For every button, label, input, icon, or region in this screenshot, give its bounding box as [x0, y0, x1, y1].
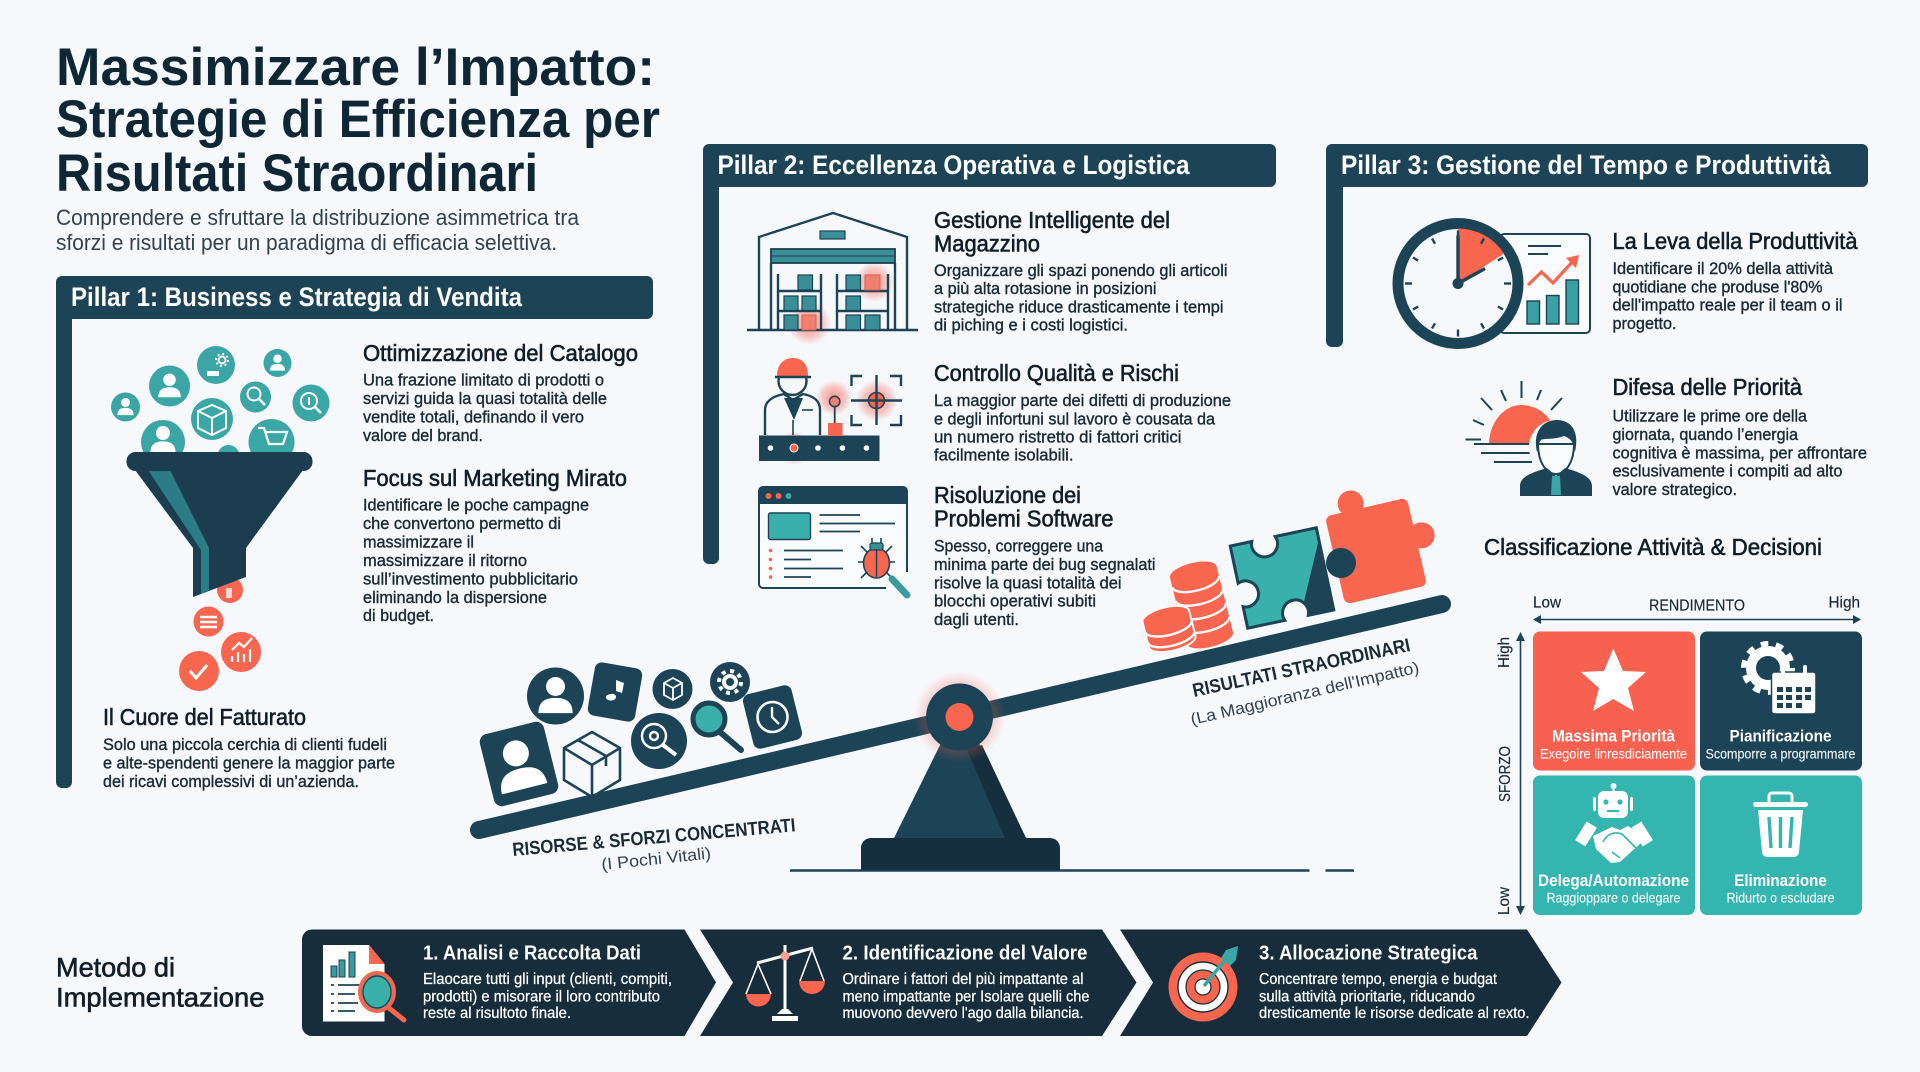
text: focus marketing: di budget. — [363, 606, 434, 625]
step 2 arrow: muovono devvero l'ago dalla bilancia. — [842, 1005, 1084, 1022]
quadrant: eliminazione: Eliminazione — [1734, 871, 1827, 890]
icon: sunrise and person — [1466, 381, 1592, 496]
step 3 arrow: 3. Allocazione Strategica — [1259, 942, 1478, 964]
text: leva produttivita: progetto. — [1612, 314, 1676, 333]
text: ottimizzazione: Una frazione limitato di prodotti o — [363, 370, 604, 390]
text: controllo qualita — [934, 360, 1231, 464]
text: ottimizzazione: Ottimizzazione del Catalogo — [363, 340, 638, 366]
text: cuore del fatturato: Il Cuore del Fatturato — [103, 704, 306, 730]
horizontal axis: Low — [1533, 594, 1561, 612]
vertical axis: High — [1496, 637, 1513, 668]
pillar 1 heading: Pillar 1: Business e Strategia di Vendita — [71, 282, 523, 312]
step 1 arrow: prodotti) e misorare il loro contributo — [423, 988, 660, 1006]
quadrant: massima priorita — [1533, 632, 1695, 770]
quadrant: massima priorita: Massima Priorità — [1552, 726, 1675, 746]
text: problemi software — [934, 482, 1156, 629]
text: focus marketing: Identificare le poche campagne — [363, 496, 589, 514]
text: cuore del fatturato: dei ricavi complessivi di un’azienda. — [103, 772, 359, 791]
quadrant: pianificazione — [1700, 632, 1862, 770]
text: difesa priorita: giornata, quando l’energia — [1612, 425, 1799, 444]
beam — [479, 604, 1442, 830]
icon: document and magnifier — [323, 945, 404, 1022]
text: gestione magazzino: a più alta rotasione in posizioni — [934, 279, 1156, 298]
text: problemi software: dagli utenti. — [934, 610, 1019, 629]
matrix heading: Classificazione Attività & Decisioni — [1484, 534, 1822, 560]
title — [56, 38, 660, 203]
subtitle: Comprendere e sfruttare la distribuzione asimmetrica tra — [56, 205, 580, 230]
quadrant: pianificazione: Scomporre a programmare — [1706, 746, 1856, 762]
quadrant: pianificazione: Pianificazione — [1730, 726, 1832, 746]
text: focus marketing: sull’investimento pubblicitario — [363, 570, 578, 588]
text: gestione magazzino: di piching e i costi logistici. — [934, 316, 1128, 334]
text: leva produttivita: La Leva della Produttività — [1612, 228, 1858, 254]
chart: seesaw balance — [478, 474, 1446, 874]
title: Strategie di Efficienza per — [56, 90, 660, 149]
text: controllo qualita: e degli infortuni sul lavoro è cousata da — [934, 410, 1216, 428]
label: left side: RISORSE & SFORZI CONCENTRATI — [512, 815, 796, 861]
subtitle — [56, 205, 580, 255]
subtitle: sforzi e risultati per un paradigma di efficacia selettiva. — [56, 230, 557, 255]
icon: worker and quality control — [759, 358, 902, 465]
text: ottimizzazione: servizi guida la quasi totalità delle — [363, 389, 607, 408]
panel: priority matrix — [1484, 534, 1862, 915]
step 3 arrow: dresticamente le risorse dedicate al rexto. — [1259, 1005, 1530, 1022]
text: problemi software: risolve la quasi totalità dei — [934, 574, 1122, 592]
icon: funnel with circles — [111, 346, 330, 691]
heading: metodo: Implementazione — [56, 982, 264, 1012]
step 1 arrow: Elaocare tutti gli input (clienti, compiti, — [423, 971, 672, 988]
text: focus marketing: massimizzare il ritorno — [363, 551, 527, 570]
text: focus marketing: massimizzare il — [363, 532, 474, 552]
quadrant: massima priorita: Exegoire linresdiciamente — [1540, 746, 1687, 762]
quadrant: eliminazione: Ridurto o escludare — [1726, 890, 1835, 906]
text: focus marketing: che convertono permetto di — [363, 514, 561, 533]
step 2 arrow: 2. Identificazione del Valore — [842, 942, 1088, 964]
quadrant: delega: Raggioppare o delegare — [1546, 890, 1681, 906]
text: controllo qualita: La maggior parte dei difetti di produzione — [934, 391, 1231, 410]
text: gestione magazzino: Organizzare gli spazi ponendo gli articoli — [934, 261, 1228, 280]
icon: target and arrow — [1168, 946, 1238, 1022]
step 3 arrow: sulla attività prioritarie, riducando — [1259, 988, 1475, 1006]
panel: pillar 3 — [1326, 144, 1868, 499]
panel: pillar 1 — [56, 276, 653, 791]
horizontal axis — [1533, 594, 1861, 624]
step 2 arrow: Ordinare i fattori del più impattante al — [842, 971, 1084, 988]
text: gestione magazzino: Magazzino — [934, 230, 1040, 256]
text: difesa priorita: Difesa delle Priorità — [1612, 374, 1802, 400]
title: Massimizzare l’Impatto: — [56, 38, 655, 97]
pillar 2 heading: Pillar 2: Eccellenza Operativa e Logistica — [718, 150, 1190, 180]
icon: puzzle pieces — [1230, 474, 1446, 628]
icon: warehouse — [747, 213, 918, 345]
panel: pillar 2 — [703, 144, 1276, 629]
step 1 arrow — [302, 930, 716, 1036]
text: difesa priorita: cognitiva è massima, per affrontare — [1612, 444, 1867, 462]
text: difesa priorita: valore strategico. — [1612, 480, 1737, 499]
step 1 arrow: reste al risultoto finale. — [423, 1005, 571, 1022]
horizontal axis: RENDIMENTO — [1649, 598, 1745, 614]
text: cuore del fatturato — [103, 704, 395, 791]
quadrant: delega — [1533, 776, 1695, 915]
vertical axis: Low — [1496, 887, 1513, 915]
pillar 2 frame — [703, 144, 1276, 564]
step 2 arrow: meno impattante per Isolare quelli che — [842, 988, 1090, 1006]
title: Risultati Straordinari — [56, 144, 538, 203]
quadrant: eliminazione — [1700, 776, 1862, 915]
text: ottimizzazione — [363, 340, 638, 445]
text: leva produttivita: Identificare il 20% della attività — [1612, 259, 1834, 278]
label: left side: (I Pochi Vitali) — [601, 845, 712, 874]
icon: browser with bug — [759, 487, 907, 595]
text: gestione magazzino — [934, 207, 1228, 334]
text: controllo qualita: un numero ristretto di fattori critici — [934, 428, 1182, 446]
pillar 1 frame — [56, 276, 653, 788]
label: left side — [512, 815, 796, 874]
text: problemi software: minima parte dei bug segnalati — [934, 555, 1156, 574]
text: focus marketing: eliminando la dispersione — [363, 588, 547, 607]
text: leva produttivita — [1612, 228, 1858, 333]
text: cuore del fatturato: e alte-spendenti genere la maggior parte — [103, 754, 395, 772]
text: cuore del fatturato: Solo una piccola cerchia di clienti fudeli — [103, 735, 387, 754]
step 3 arrow: Concentrare tempo, energia e budgat — [1259, 971, 1497, 988]
text: gestione magazzino: Gestione Intelligente del — [934, 207, 1170, 233]
step 1 arrow: 1. Analisi e Raccolta Dati — [423, 942, 641, 964]
text: ottimizzazione: vendite totali, definando il vero — [363, 408, 584, 426]
text: focus marketing — [363, 465, 627, 625]
text: controllo qualita: facilmente isolabili. — [934, 446, 1074, 464]
quadrant: delega: Delega/Automazione — [1538, 871, 1689, 890]
vertical axis: SFORZO — [1497, 746, 1514, 802]
text: problemi software: Problemi Software — [934, 506, 1114, 532]
heading: metodo: Metodo di — [56, 952, 175, 982]
fulcrum base — [790, 671, 1354, 870]
label: right side: RISULTATI STRAORDINARI — [1191, 635, 1412, 702]
vertical axis — [1496, 632, 1525, 915]
text: leva produttivita: dell'impatto reale per il team o il — [1612, 296, 1842, 314]
text: problemi software: Spesso, correggere una — [934, 536, 1104, 556]
icon: coins — [1140, 557, 1235, 656]
icon: scales — [746, 945, 825, 1021]
pillar 3 frame — [1326, 144, 1868, 347]
pillar 3 heading: Pillar 3: Gestione del Tempo e Produttività — [1341, 150, 1832, 180]
label: right side — [1189, 635, 1421, 729]
text: gestione magazzino: strategiche riduce drasticamente i tempi — [934, 298, 1224, 316]
step 3 arrow — [1120, 930, 1562, 1036]
text: controllo qualita: Controllo Qualità e Rischi — [934, 360, 1179, 386]
text: difesa priorita: Utilizzare le prime ore della — [1612, 406, 1808, 426]
horizontal axis: High — [1828, 594, 1860, 612]
icon: clock and chart — [1398, 224, 1590, 344]
text: difesa priorita — [1612, 374, 1867, 499]
text: problemi software: blocchi operativi subiti — [934, 592, 1096, 610]
text: focus marketing: Focus sul Marketing Mirato — [363, 465, 627, 491]
icon: resources cluster — [478, 661, 804, 808]
text: ottimizzazione: valore del brand. — [363, 426, 483, 445]
step 2 arrow — [700, 930, 1136, 1036]
text: leva produttivita: quotidiane che produse l'80% — [1612, 278, 1822, 296]
heading: metodo — [56, 952, 264, 1012]
text: problemi software: Risoluzione dei — [934, 482, 1081, 508]
text: difesa priorita: esclusivamente i compiti ad alto — [1612, 462, 1842, 480]
label: right side: (La Maggioranza dell'Impatto) — [1189, 659, 1421, 729]
